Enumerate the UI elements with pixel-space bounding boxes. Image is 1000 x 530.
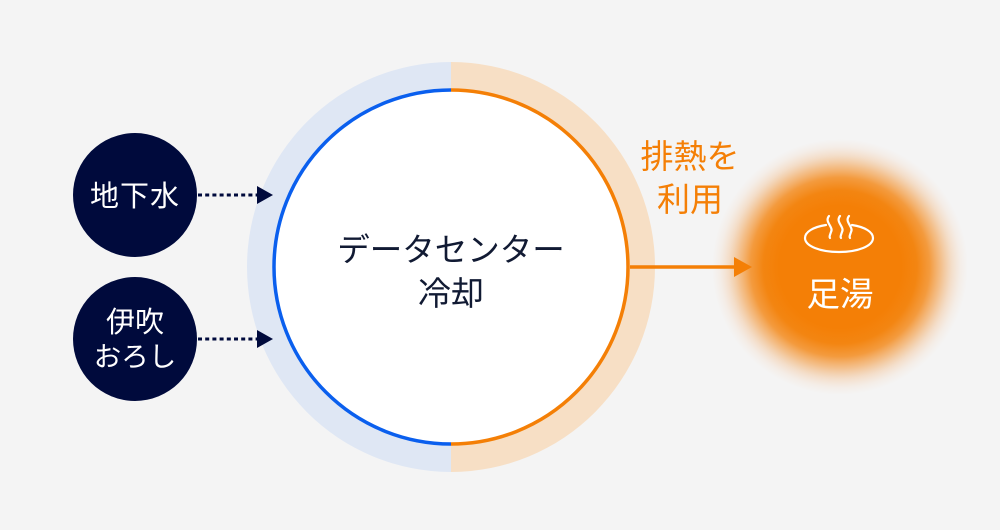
- footbath label: 足湯: [806, 277, 874, 314]
- heat reuse label: 排熱を: [640, 138, 740, 175]
- panel: central data center circle: [247, 62, 655, 472]
- orange half outline: [451, 90, 628, 444]
- central label: データセンター: [337, 232, 565, 268]
- node: groundwater: [73, 133, 197, 257]
- node: Ibuki oroshi wind: おろし: [94, 341, 176, 372]
- footbath glow circle: [712, 139, 968, 395]
- central label second line: 冷却: [418, 275, 484, 312]
- node: Ibuki oroshi wind: [73, 277, 197, 401]
- arrow: groundwater to cooling: [198, 186, 273, 204]
- icon: hot spring: [805, 216, 873, 252]
- blue half outline: [274, 90, 451, 444]
- node: groundwater: 地下水: [90, 180, 180, 213]
- arrow: wind to cooling: [198, 330, 273, 348]
- node: Ibuki oroshi wind: 伊吹: [106, 306, 164, 339]
- arrow: waste heat to footbath: [630, 257, 752, 277]
- orange outer half ring: [451, 62, 655, 472]
- blue outer half ring: [247, 62, 451, 472]
- white inner disc: [274, 90, 628, 444]
- heat reuse label: 利用: [657, 181, 723, 218]
- heat reuse label: [640, 138, 740, 218]
